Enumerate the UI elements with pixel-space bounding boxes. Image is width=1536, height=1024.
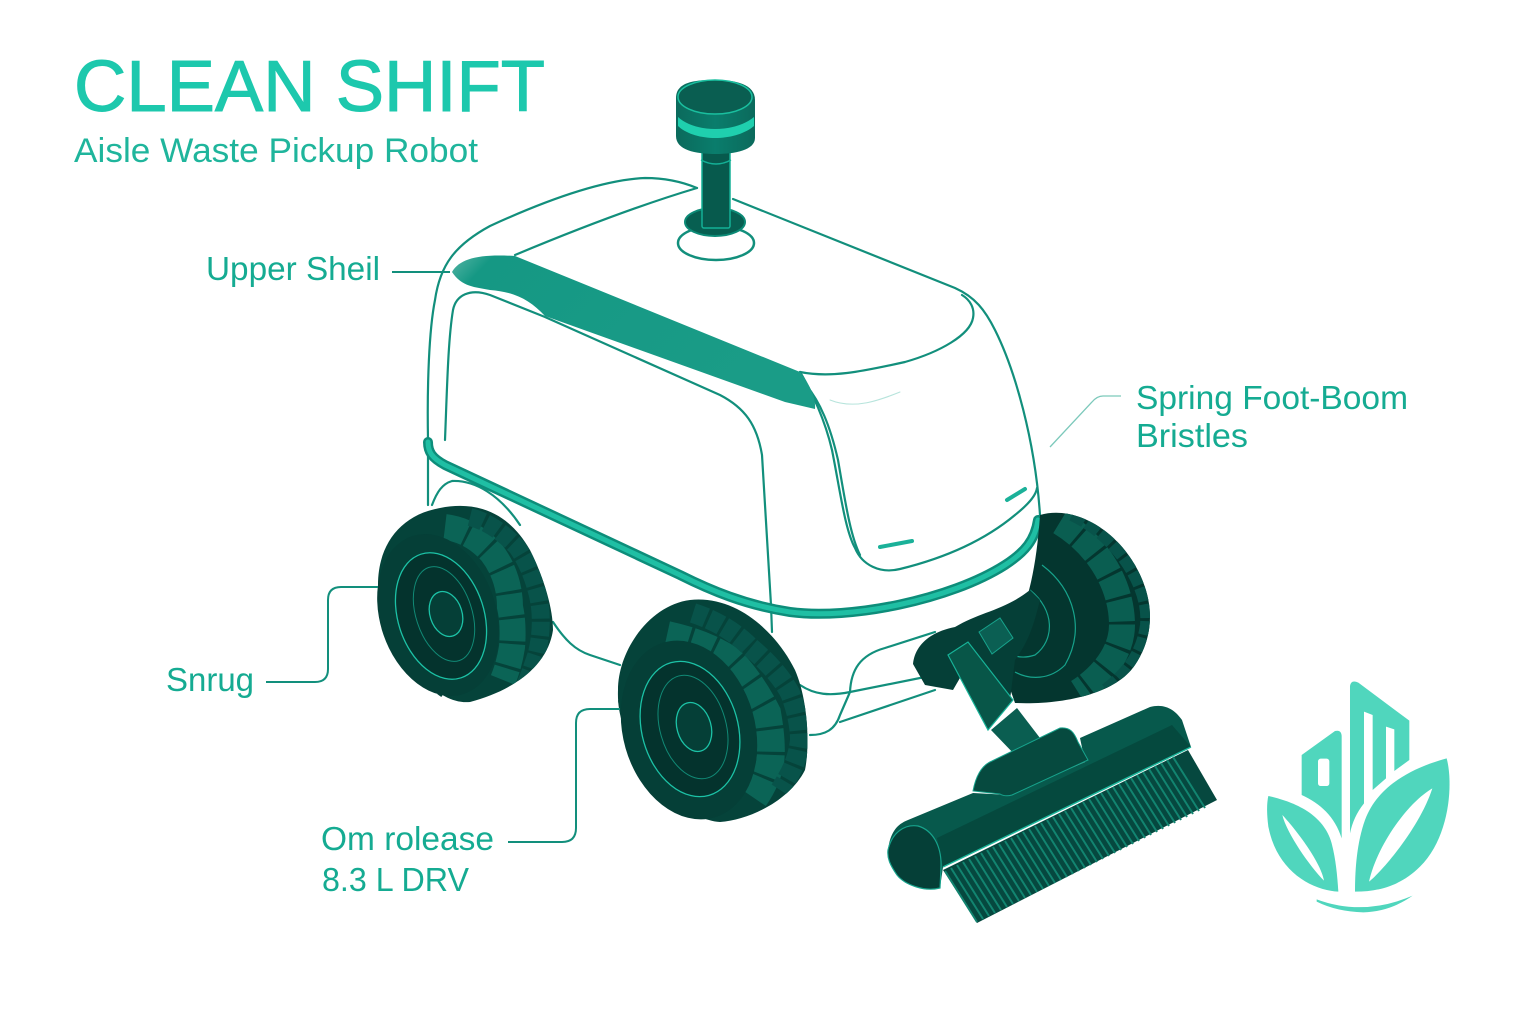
label: spring foot-boom bristles: Bristles <box>1136 417 1248 454</box>
brush end cap <box>888 826 941 889</box>
logo: leaves and buildings <box>1267 682 1450 912</box>
brush bar <box>888 706 1191 889</box>
beacon head <box>676 80 755 154</box>
brush saddle <box>973 728 1088 796</box>
tire <box>378 506 553 702</box>
beacon post <box>702 150 730 228</box>
wheel face <box>357 518 519 712</box>
broom head <box>888 706 1217 923</box>
logo base swoosh <box>1317 896 1413 912</box>
wheel face <box>600 624 778 836</box>
label: spring foot-boom bristles: Spring Foot-Boom <box>1136 379 1408 416</box>
logo left building window <box>1318 759 1329 786</box>
label: om rolease <box>321 709 620 898</box>
label: upper shell: Upper Sheil <box>206 250 380 287</box>
beacon collar <box>678 226 754 260</box>
front panel marks <box>880 489 1025 547</box>
brush bar lower facet <box>937 725 1191 867</box>
upper shell shaded band <box>452 256 815 409</box>
beacon <box>676 80 755 260</box>
logo tall building <box>1350 682 1409 833</box>
rear right wheel <box>1000 513 1150 703</box>
body belt stripe <box>428 442 1038 614</box>
title: CLEAN SHIFT <box>74 47 545 127</box>
body shell outline <box>428 178 1040 735</box>
beacon base <box>685 208 745 236</box>
subtitle: Aisle Waste Pickup Robot <box>74 132 479 170</box>
tread rows <box>667 613 800 800</box>
logo left leaf <box>1267 796 1338 892</box>
knobby edge <box>380 590 445 697</box>
tread rows <box>445 517 541 690</box>
front middle wheel <box>618 600 808 822</box>
broom arm and joint <box>913 590 1040 757</box>
label: snrug: Snrug <box>166 661 254 698</box>
beacon neck ring <box>701 160 731 164</box>
label: spring foot-boom bristles <box>1050 379 1408 454</box>
rear tread <box>1060 515 1146 692</box>
logo left building <box>1302 731 1342 838</box>
tire <box>618 600 808 822</box>
robot <box>357 80 1217 923</box>
knobby edge <box>620 700 700 817</box>
logo right leaf <box>1355 758 1450 892</box>
bristles <box>943 750 1217 923</box>
logo left leaf slit <box>1282 815 1324 881</box>
label: om rolease: 8.3 L DRV <box>322 861 469 898</box>
label: snrug <box>166 587 378 698</box>
label: om rolease: Om rolease <box>321 820 494 857</box>
logo right leaf slit <box>1369 788 1432 882</box>
front left wheel <box>377 506 553 702</box>
